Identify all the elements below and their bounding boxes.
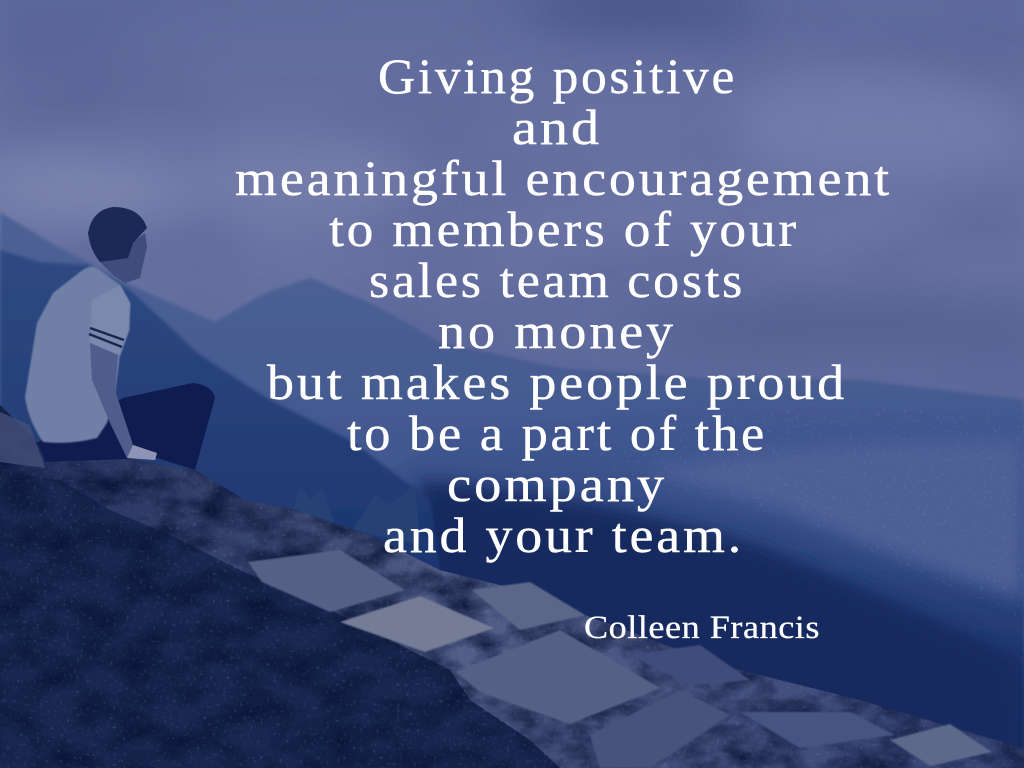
quote text: meaningful encouragement (235, 150, 892, 206)
arm (90, 343, 157, 460)
quote text: and (512, 99, 602, 155)
trousers (38, 383, 215, 470)
quote text: sales team costs (369, 252, 745, 308)
hair (88, 207, 147, 262)
quote text: and your team. (383, 507, 744, 563)
stone wall (0, 400, 1024, 768)
quote text: Giving positive (378, 48, 737, 104)
face (100, 233, 147, 283)
quote text: company (447, 456, 667, 512)
distant mountains (0, 212, 1024, 768)
quote text: but makes people proud (267, 354, 847, 410)
valley and city (300, 405, 1024, 768)
quote text: no money (438, 303, 676, 359)
attribution: Colleen Francis (584, 610, 820, 646)
quote text: to be a part of the (347, 405, 767, 461)
quote text: to members of your (329, 201, 799, 257)
man on wall (25, 207, 215, 470)
trees (292, 485, 420, 545)
dark left mountain (0, 250, 440, 570)
shirt (25, 266, 130, 443)
